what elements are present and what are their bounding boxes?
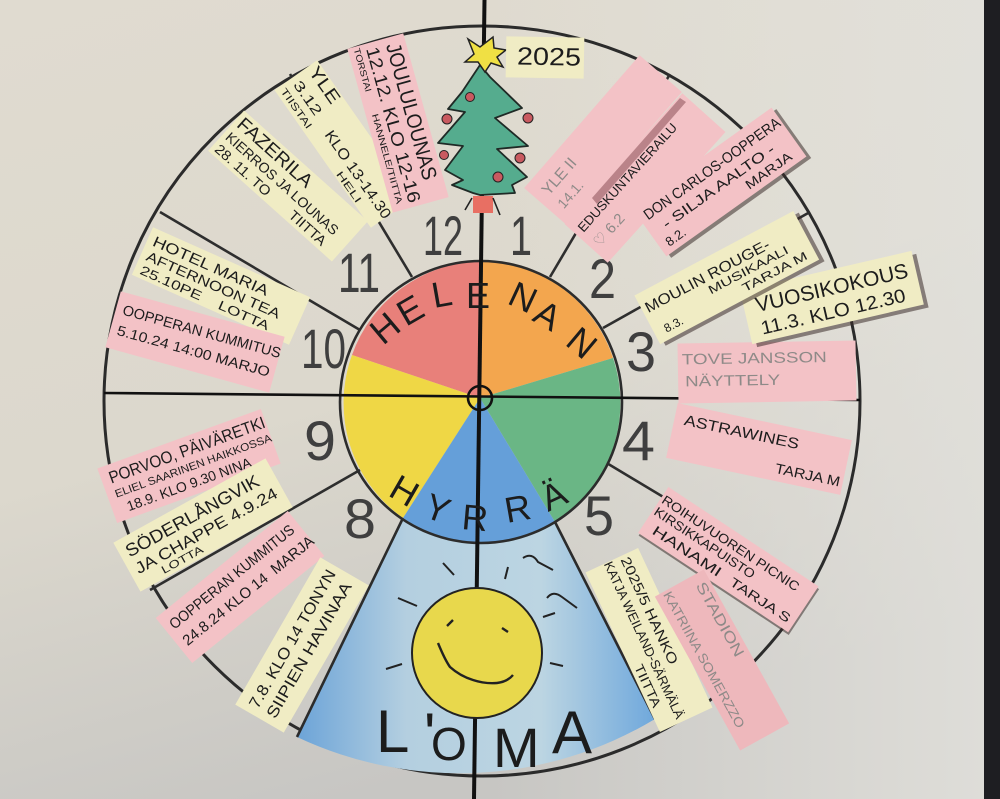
note: Fazerila: FAZERILA — [232, 114, 317, 192]
note: YLE 3.12: HELI — [333, 170, 363, 205]
note: Don Carlos: MARJA — [742, 149, 795, 192]
note: Tonyn siipien havinaa: SIIPIEN HAVINAA — [264, 579, 356, 722]
note: Yle II: 14.1. — [554, 177, 587, 211]
note: Vuosikokous: 11.3. KLO 12.30 — [759, 286, 908, 339]
note: YLE 3.12: KLO 13-14.30 — [321, 127, 394, 222]
months 12 and 1: 1 — [510, 204, 532, 267]
note: Tove Jansson: TOVE JANSSON — [682, 349, 827, 368]
month spokes — [150, 74, 810, 590]
heading: L'OMA: L — [376, 698, 409, 765]
note: Stadion: KATRIINA SOMERZZO — [660, 589, 748, 731]
months 2 to 5: 2 — [589, 247, 616, 310]
note: Roihuvuori: HANAMI — [649, 522, 725, 580]
note: Hotel Maria: AFTERNOON TEA — [144, 248, 284, 322]
months 8 to 11: 10 — [301, 317, 346, 380]
note: Vuosikokous — [740, 250, 929, 348]
note: Eduskuntavierailu: EDUSKUNTAVIERAILU — [575, 120, 680, 235]
note: YLE 3.12: 3.12 — [290, 77, 326, 119]
pie slice: blue — [403, 398, 555, 542]
axis lines — [104, 0, 860, 799]
outer wheel ring — [104, 26, 860, 776]
pie slice: red — [352, 261, 481, 398]
note: Roihuvuori: TARJA S — [727, 574, 794, 626]
heading: L'OMA: ' — [424, 701, 435, 768]
note: Yle II — [524, 55, 682, 225]
pie slice: green — [480, 358, 620, 522]
heading: L'OMA: M — [493, 716, 540, 779]
note shadow between Yle II and Eduskunta — [592, 98, 686, 204]
note: Porvoo — [97, 409, 281, 523]
note: YLE 3.12 — [274, 59, 416, 229]
note: Oopperan kummitus 24.8: OOPPERAN KUMMITUS — [166, 522, 298, 633]
wedge outline — [297, 518, 655, 737]
tree star — [465, 37, 506, 72]
note: Eduskuntavierailu — [565, 93, 725, 263]
centre pie: Helenan Hyrrä — [297, 261, 655, 773]
note: Stadion — [655, 569, 789, 751]
months 8 to 11: 8 — [344, 487, 376, 550]
note: Oopperan kummitus 5.10: 5.10.24 14:00 MARJO — [115, 322, 272, 380]
note: Hanko: TIITTA — [631, 662, 664, 710]
note: Tove Jansson — [677, 340, 857, 404]
note: Moulin Rouge: MUSIKAALI — [706, 243, 791, 297]
note: Tove Jansson: NÄYTTELY — [685, 372, 780, 390]
note: Oopperan kummitus 5.10 — [105, 291, 285, 393]
note: Porvoo: 18.9. KLO 9.30 NINA — [124, 454, 254, 514]
note: Astrawines — [666, 403, 852, 495]
note: Hanko: KATJA WEILAND-SÄRMÄLÄ — [601, 559, 687, 722]
pie slice: orange — [480, 261, 613, 398]
note: Oopperan kummitus 24.8 — [156, 510, 325, 663]
note: Fazerila — [208, 111, 368, 261]
months 8 to 11: 11 — [338, 241, 380, 304]
note: Hanko: 2025/5 HANKO — [618, 554, 682, 667]
wedge: blue holiday — [297, 518, 655, 773]
note: Porvoo: ELIEL SAARINEN HAIKKOSSA — [113, 432, 274, 501]
months 12 and 1: 12 — [423, 204, 463, 267]
note: Moulin Rouge: MOULIN ROUGE- — [642, 236, 773, 317]
note: Tonyn siipien havinaa: 7.8. KLO 14 TONYN — [247, 567, 340, 712]
months 8 to 11 — [301, 241, 380, 550]
note: Hanko — [586, 548, 712, 732]
note: Porvoo: PORVOO, PÄIVÄRETKI — [106, 413, 268, 487]
month numbers — [301, 204, 656, 550]
heading: HELENAN: HELENAN — [362, 272, 605, 367]
dark wall strip — [984, 0, 1000, 799]
note: Don Carlos: - SILJA AALTO - — [659, 141, 778, 232]
months 2 to 5: 5 — [584, 484, 614, 547]
note: Roihuvuori: ROIHUVUOREN PICNIC — [659, 492, 802, 594]
note: YLE 3.12: TIISTAI — [278, 86, 314, 131]
note: Oopperan kummitus 24.8: 24.8.24 KLO 14 MARJA — [179, 533, 318, 649]
months 2 to 5: 4 — [622, 409, 655, 472]
note: Don Carlos — [632, 106, 811, 260]
note: Don Carlos: 8.2. — [662, 224, 689, 249]
note: Roihuvuori: KIRSIKKAPUISTO — [651, 504, 758, 582]
sun face — [412, 588, 542, 718]
note: Yle II: YLE II — [539, 155, 580, 199]
note: Fazerila: KIERROS JA LOUNAS — [222, 129, 342, 238]
note: YLE 3.12: YLE — [305, 62, 345, 107]
year note: 2025: 2025 — [517, 43, 581, 72]
months 2 to 5: 3 — [626, 320, 656, 383]
note: Oopperan kummitus 5.10: OOPPERAN KUMMITUS — [121, 303, 283, 362]
icon: smiling sun — [386, 556, 577, 718]
note: Astrawines: TARJA M — [774, 460, 842, 489]
sun eyes and mouth — [438, 620, 513, 683]
tree ornaments — [440, 92, 533, 182]
tree foliage — [438, 65, 528, 195]
heading: HYRRÄ: HYRRÄ — [383, 466, 573, 539]
note: Hotel Maria: HOTEL MARIA — [150, 233, 271, 300]
heading: L'OMA: O — [431, 718, 467, 770]
note: Eduskuntavierailu: ♡ 6.2 — [590, 210, 629, 250]
note: Moulin Rouge: TARJA M — [740, 249, 810, 295]
note: Don Carlos: DON CARLOS-OOPPERA — [641, 114, 784, 224]
months 8 to 11: 9 — [304, 409, 336, 472]
tree trunk — [465, 196, 500, 215]
note: Söderlångvik: SÖDERLÅNGVIK — [122, 471, 263, 561]
note: Söderlångvik: JA CHAPPE 4.9.24 — [133, 485, 281, 578]
note: Joululounas 12.12. — [347, 33, 449, 213]
icon: Christmas tree — [438, 37, 533, 215]
heading: L'OMA: A — [552, 699, 592, 766]
note: Söderlångvik: LOTTA — [160, 544, 206, 577]
note: Roihuvuori — [637, 487, 820, 635]
note: Vuosikokous: VUOSIKOKOUS — [753, 260, 910, 317]
note: Moulin Rouge — [634, 209, 825, 348]
note: Fazerila: 28. 11. TO TIITTA — [212, 141, 330, 249]
note: Astrawines: ASTRAWINES — [683, 412, 801, 453]
pie slice: yellow — [344, 355, 480, 518]
note: Joululounas 12.12.: JOULULOUNAS — [381, 41, 441, 183]
note: Söderlångvik — [113, 458, 293, 592]
note: Joululounas 12.12.: HANNELE/TIITTA — [370, 113, 404, 205]
note: Joululounas 12.12.: TORSTAI — [352, 47, 373, 93]
note: Hotel Maria — [132, 227, 310, 345]
pie outline — [340, 261, 622, 543]
note: Stadion: STADION — [692, 579, 747, 660]
year note: 2025 — [506, 36, 584, 79]
months 2 to 5 — [584, 247, 656, 547]
note: Joululounas 12.12.: 12.12. KLO 12-16 — [362, 45, 424, 205]
sun rays — [386, 556, 577, 669]
note: Hotel Maria: 25.10PE LOTTA — [138, 263, 272, 333]
months 12 and 1 — [423, 204, 532, 267]
note: Moulin Rouge: 8.3. — [661, 314, 686, 335]
note: Tonyn siipien havinaa — [235, 557, 369, 733]
